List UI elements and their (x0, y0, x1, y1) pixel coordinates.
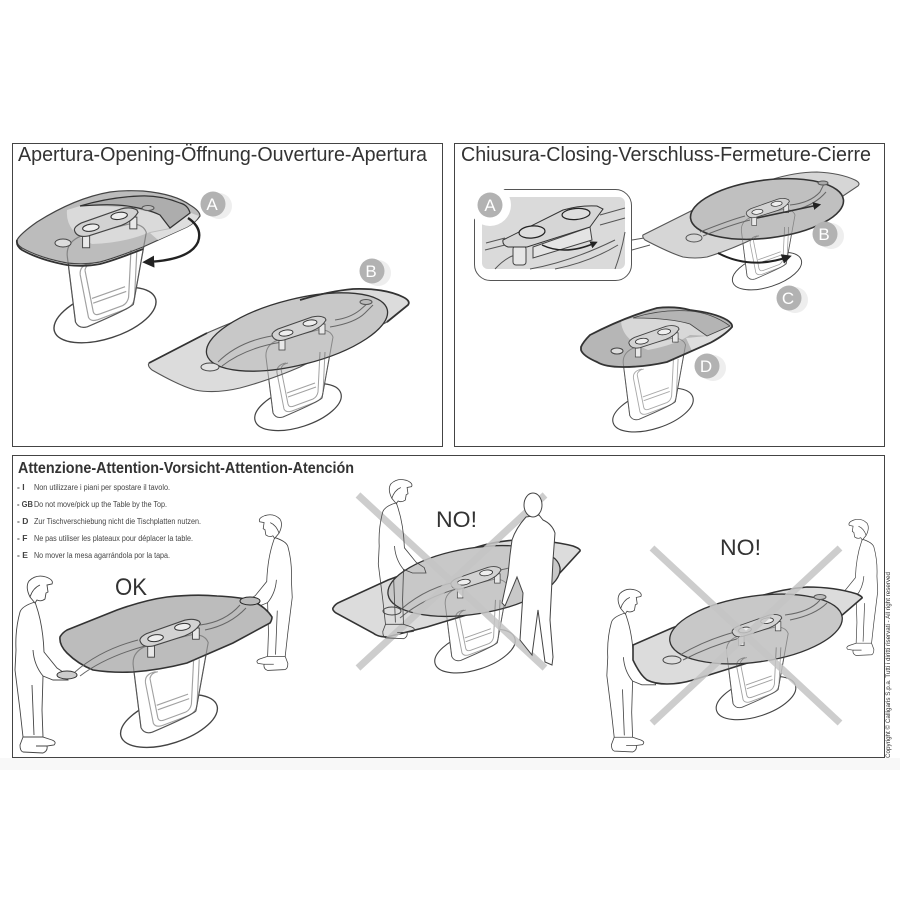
arrow: slide (757, 205, 818, 218)
table: NO centre (333, 535, 580, 682)
copyright: Copyright © Calligaris S.p.a. Tutti i diritti riservati - All right reserved (884, 572, 892, 758)
marker B (812, 222, 844, 249)
instructions list (17, 482, 201, 560)
table B open (148, 277, 409, 440)
label NO centre: NO! (436, 507, 477, 532)
panel: closing (454, 144, 884, 446)
marker B: B (818, 225, 830, 244)
person: left, NO right (607, 589, 656, 752)
arrow: rotate C (718, 253, 788, 263)
heading: attention: Attenzione-Attention-Vorsicht-Attention-Atención (18, 460, 354, 477)
inset detail A (469, 184, 650, 280)
table B open, closing (643, 171, 859, 297)
handle pads, OK (57, 597, 260, 679)
instructions list: - E (17, 550, 28, 560)
instructions list: No mover la mesa agarrándola por la tapa. (34, 551, 170, 560)
instructions list: - GB (17, 499, 33, 509)
marker A (200, 192, 232, 219)
table: OK scene (60, 595, 272, 758)
person: back view, NO centre (502, 493, 555, 665)
instructions list: Ne pas utiliser les plateaux pour déplacer la table. (34, 534, 193, 543)
heading: opening: Apertura-Opening-Öffnung-Ouverture-Apertura (18, 144, 428, 166)
marker D: D (700, 357, 712, 376)
cross: NO centre (358, 495, 545, 668)
person: left, NO centre (378, 479, 426, 639)
instructions list: - F (17, 533, 27, 543)
marker C: C (782, 289, 794, 308)
heading: closing: Chiusura-Closing-Verschluss-Fermeture-Cierre (461, 144, 871, 166)
marker inset A: A (484, 196, 496, 215)
marker B: B (365, 262, 377, 281)
panel: attention (12, 456, 884, 758)
marker A: A (206, 195, 218, 214)
panel: opening (12, 144, 442, 446)
cross: NO right (652, 548, 840, 723)
table: NO right (633, 584, 862, 728)
person: left, OK (15, 576, 68, 753)
table D closed (581, 307, 732, 441)
person: right, NO right (837, 519, 878, 656)
marker B (360, 258, 391, 286)
instructions list: Do not move/pick up the Table by the Top. (34, 500, 167, 509)
label OK: OK (115, 574, 147, 601)
instructions list: - I (17, 482, 25, 492)
marker inset A (478, 192, 502, 218)
instructions list: Zur Tischverschiebung nicht die Tischplatten nutzen. (34, 517, 201, 526)
marker D (694, 354, 726, 381)
table A closed (17, 191, 200, 354)
marker C (776, 286, 808, 313)
instructions list: - D (17, 516, 28, 526)
person: right, OK (246, 515, 292, 670)
instructions list: Non utilizzare i piani per spostare il tavolo. (34, 483, 170, 492)
label NO right: NO! (720, 535, 761, 560)
arrow: opening rotation (147, 218, 199, 262)
